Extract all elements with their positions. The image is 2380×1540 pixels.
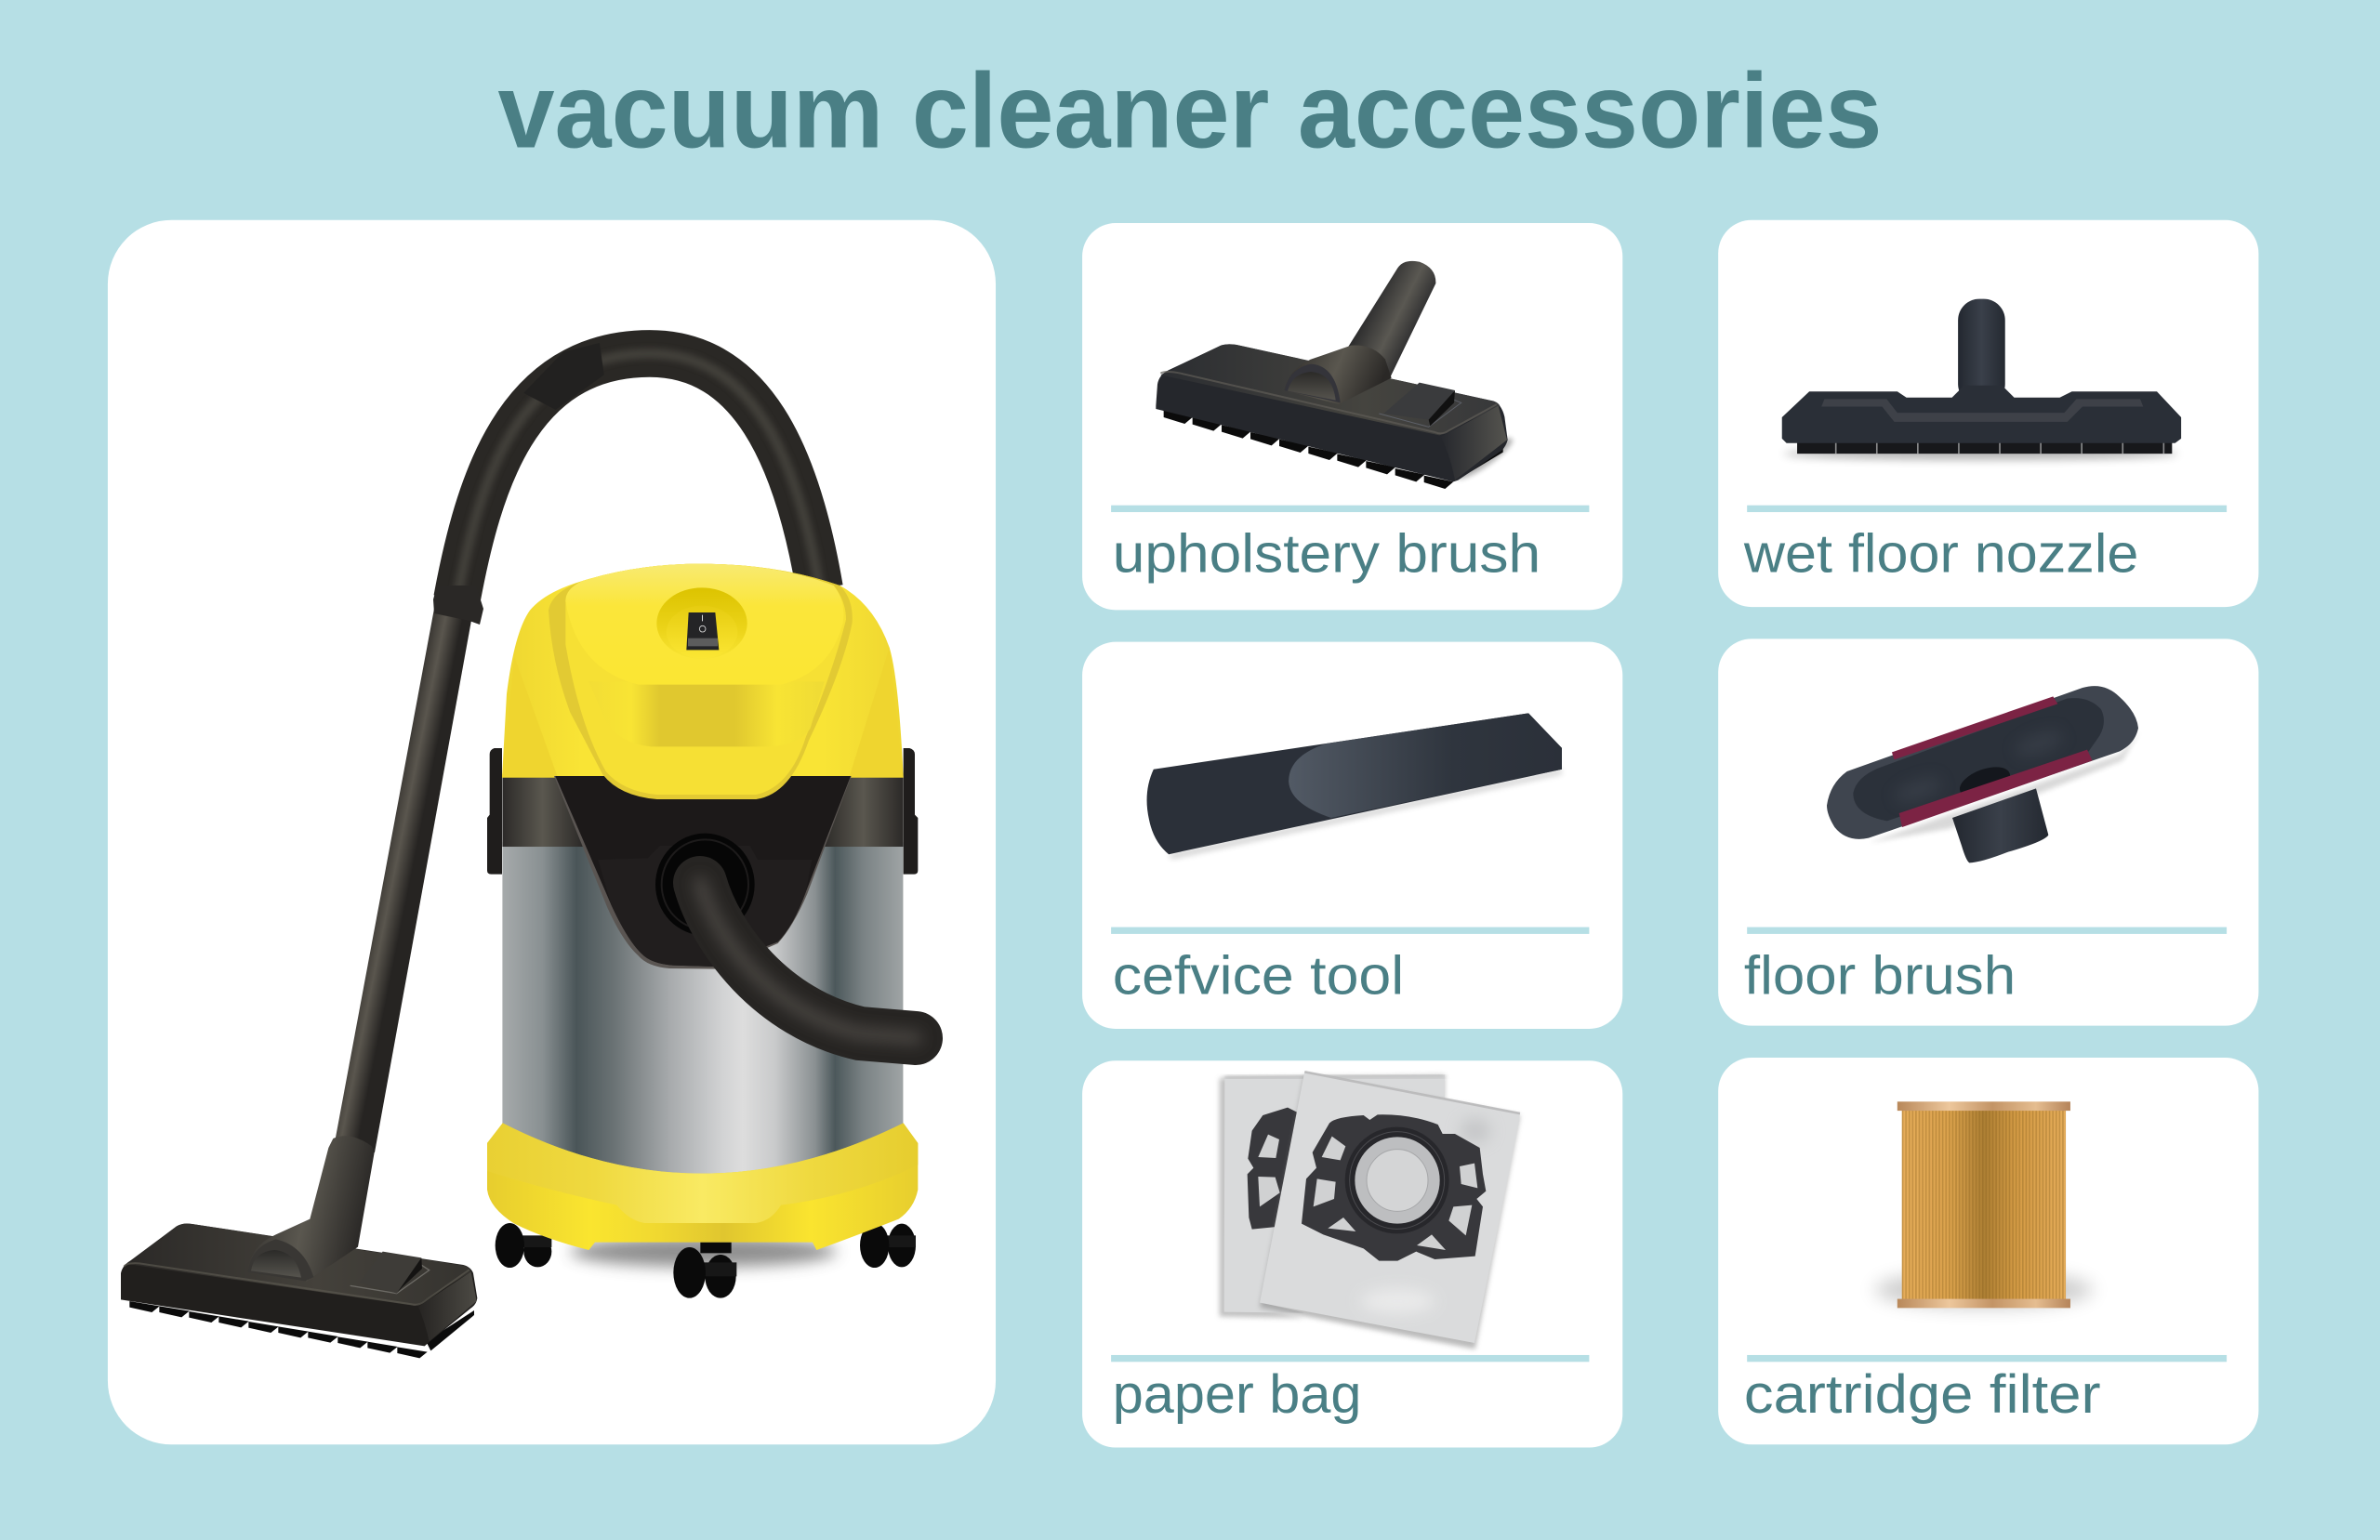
icon: wet floor nozzle: [1782, 299, 2181, 460]
label: upholstery brush: [1113, 524, 1540, 585]
panel: vacuum cleaner: [108, 220, 996, 1444]
handle: [1348, 261, 1435, 378]
icon: black front panel: [554, 776, 852, 969]
icon: wand: [333, 586, 483, 1152]
pedal: [1379, 400, 1461, 427]
panel: upholstery brush: [1082, 223, 1622, 610]
socket: [248, 1136, 375, 1281]
pedal: [350, 1264, 430, 1294]
panel: paper bag: [1082, 1060, 1622, 1448]
title: vacuum cleaner accessories: [498, 52, 1882, 170]
icon: dark band: [502, 774, 903, 847]
divider: [1747, 1355, 2227, 1362]
icon: lid cover: [549, 564, 853, 799]
icon: crevice tool: [1147, 713, 1562, 859]
divider: [1747, 928, 2227, 934]
divider: [1111, 506, 1589, 512]
panel: cartridge filter: [1718, 1058, 2258, 1444]
icon: floor nozzle: [121, 1136, 477, 1358]
icon: floor brush: [1827, 686, 2140, 862]
icon: yellow lid: [502, 564, 904, 969]
icon: yellow base: [487, 1123, 918, 1250]
label: floor brush: [1744, 945, 2016, 1006]
icon: power switch: [656, 587, 747, 659]
icon: steel drum: [502, 842, 903, 1199]
icon: front paper bag: [1260, 1072, 1520, 1349]
bristles: [129, 1301, 474, 1358]
divider: [1111, 928, 1589, 934]
icon: cartridge filter: [1874, 1101, 2093, 1308]
icon: hose port: [655, 834, 755, 936]
bristles: [1164, 411, 1503, 489]
label: cartridge filter: [1744, 1364, 2101, 1425]
divider: [1111, 1355, 1589, 1362]
label: paper bag: [1113, 1364, 1361, 1425]
icon: upholstery brush: [1156, 261, 1516, 489]
icon: hose: [456, 343, 820, 599]
icon: machine shadow: [570, 1236, 837, 1267]
panel: floor brush: [1718, 638, 2258, 1026]
icon: back paper bag: [1220, 1075, 1445, 1318]
label: wet floor nozzle: [1743, 524, 2138, 585]
icon: front hose: [700, 883, 916, 1038]
divider: [1747, 506, 2227, 512]
panel: wet floor nozzle: [1718, 220, 2258, 607]
icon: castor wheels: [496, 1223, 916, 1298]
icon: side handles: [487, 748, 918, 875]
panel: crevice tool: [1082, 642, 1622, 1029]
label: cefvice tool: [1113, 945, 1404, 1006]
